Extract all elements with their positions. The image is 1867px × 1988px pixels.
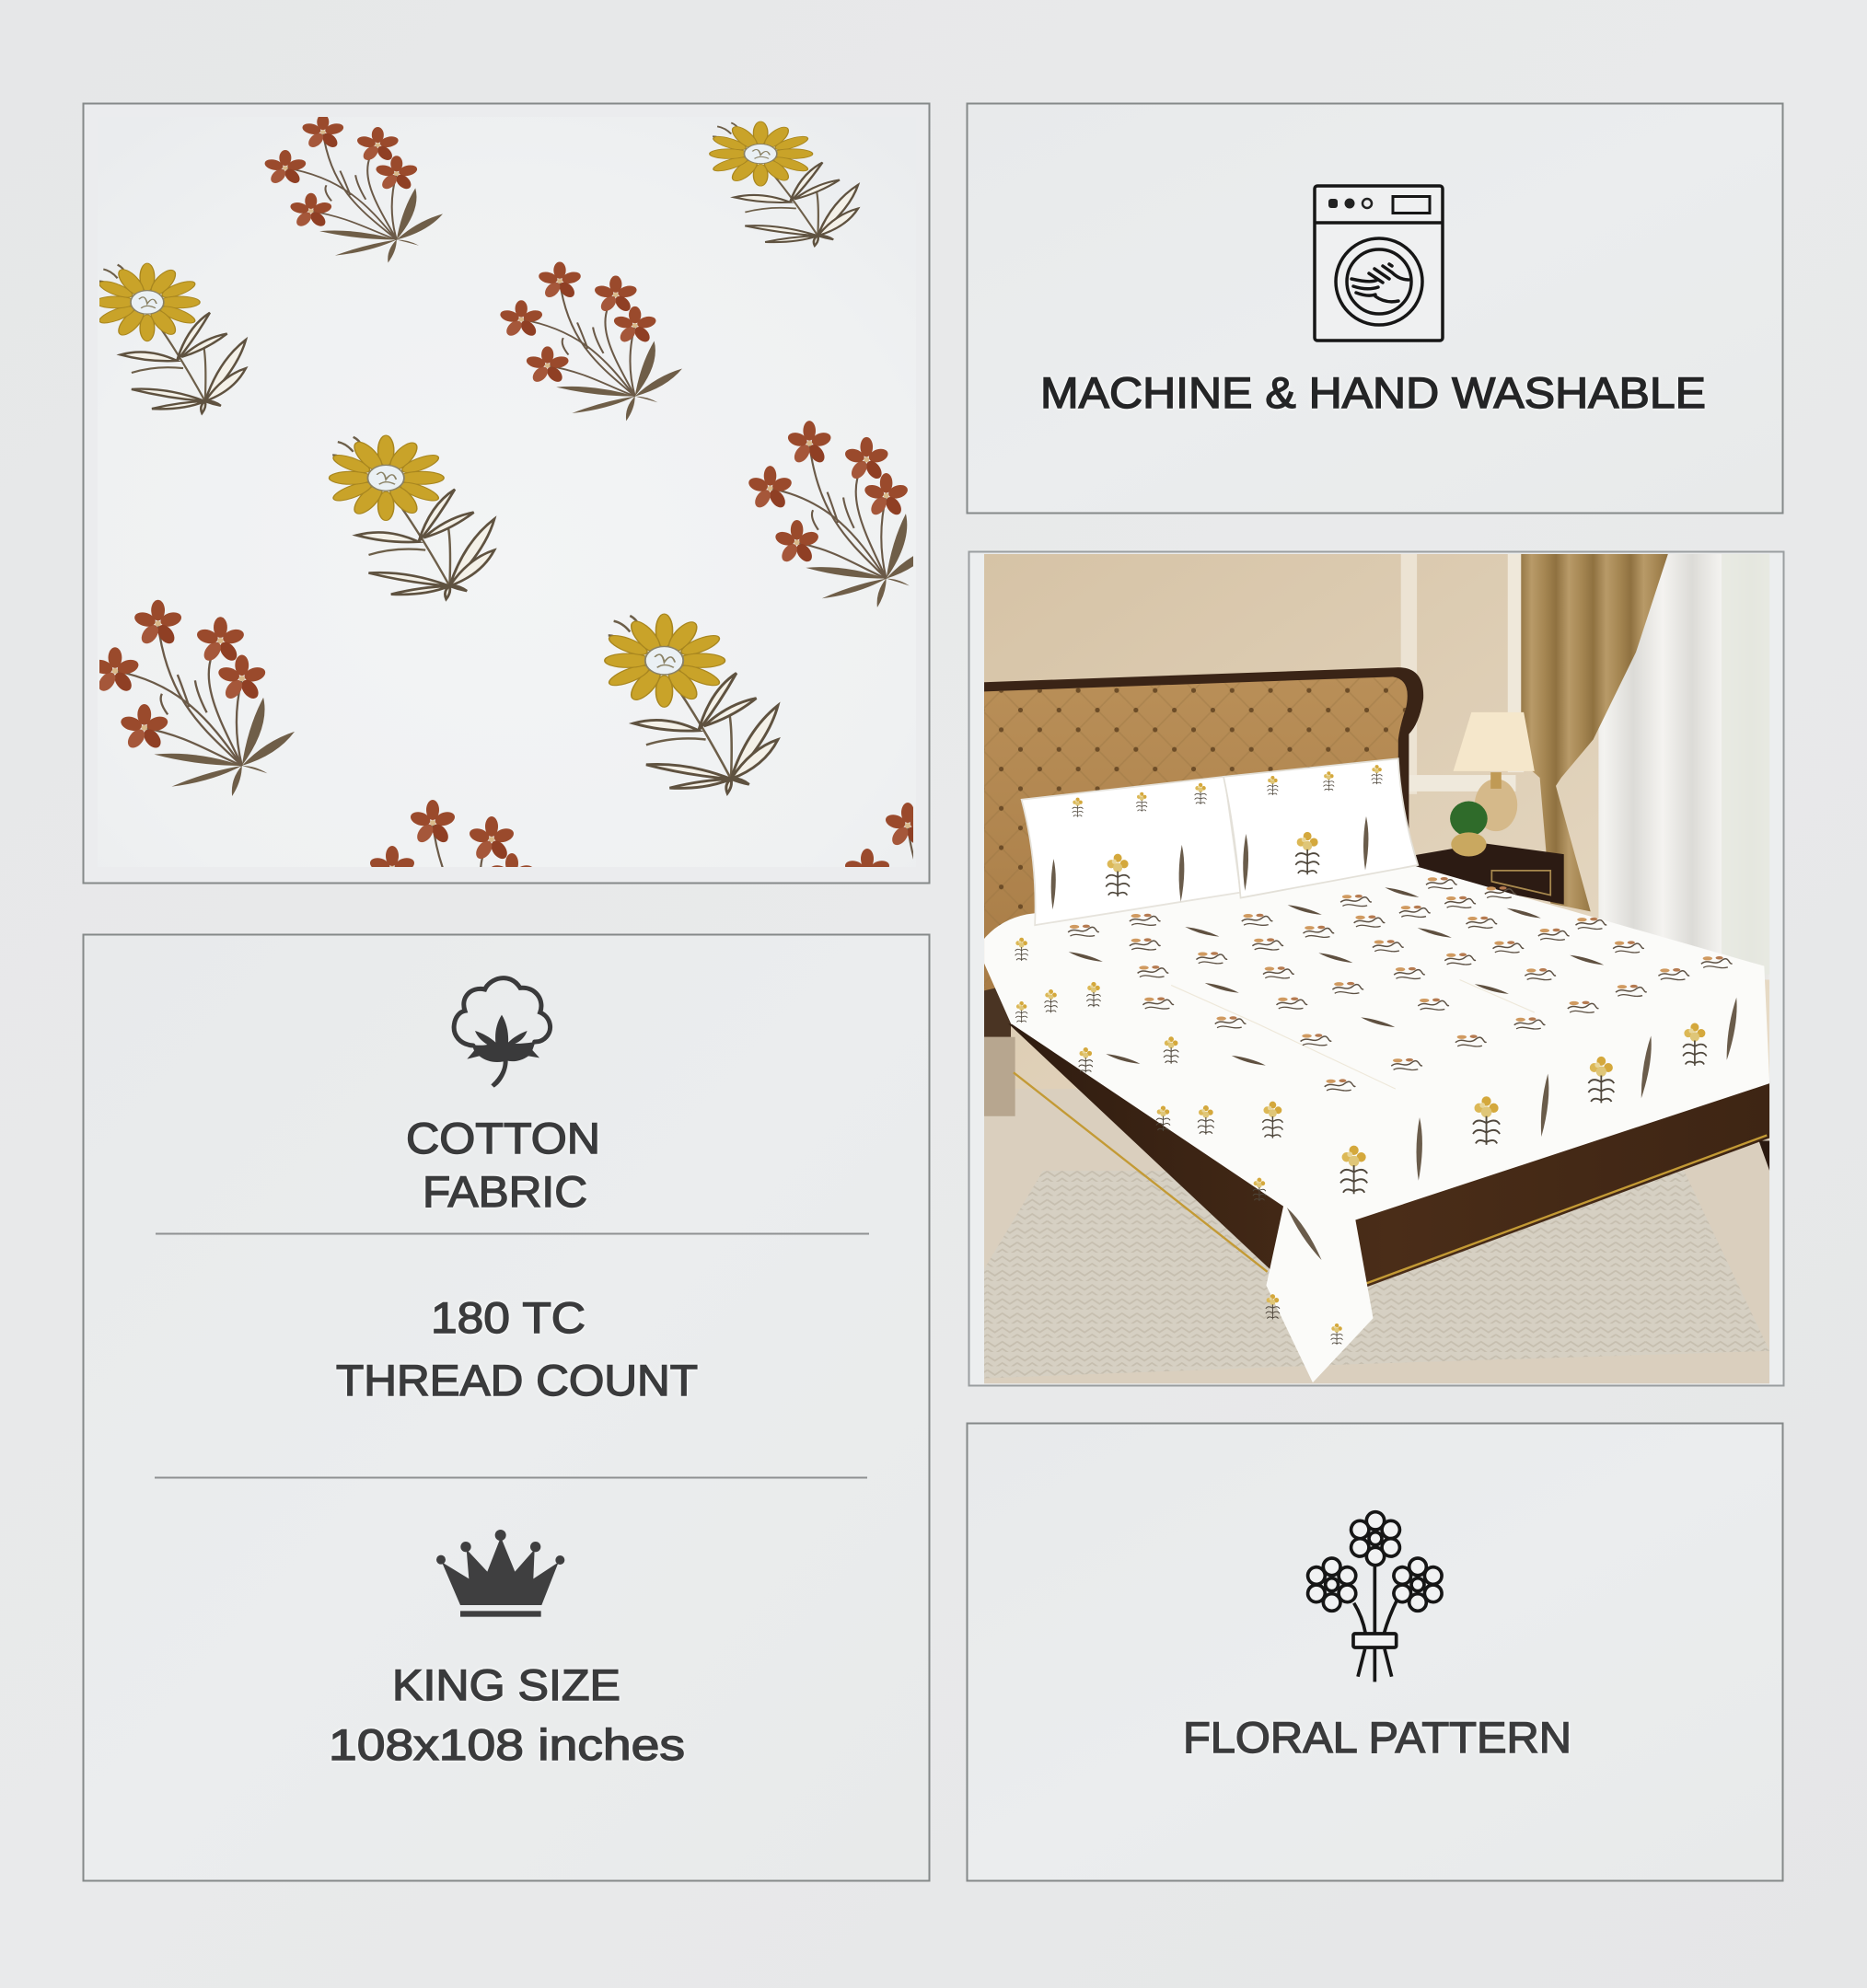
text: cotton fabric: FABRIC bbox=[423, 1167, 587, 1216]
text: king size: KING SIZE bbox=[392, 1660, 620, 1709]
text: king size bbox=[329, 1660, 685, 1769]
heading: machine and hand washable: MACHINE & HAND WASHABLE bbox=[1040, 368, 1706, 417]
panel: bedroom photo bbox=[968, 552, 1784, 1386]
text: thread count: 180 TC bbox=[431, 1293, 586, 1342]
heading: floral pattern: FLORAL PATTERN bbox=[1183, 1713, 1571, 1762]
text: cotton fabric bbox=[406, 1114, 600, 1216]
panel: machine and hand washable bbox=[967, 103, 1782, 514]
panel: floral pattern bbox=[967, 1423, 1782, 1881]
icon: crown bbox=[436, 1530, 565, 1617]
flower motifs on fabric bbox=[99, 117, 913, 867]
text: thread count bbox=[336, 1293, 698, 1404]
bedding motifs bbox=[1015, 765, 1739, 1345]
icon: cotton boll bbox=[451, 976, 552, 1088]
icon: flower bouquet bbox=[1305, 1509, 1444, 1682]
illustration: bed in room bbox=[984, 554, 1769, 1384]
text: king size: 108x108 inches bbox=[329, 1720, 685, 1769]
panel: fabric floral pattern swatch bbox=[83, 103, 930, 884]
text: cotton fabric: COTTON bbox=[406, 1114, 600, 1162]
text: thread count: THREAD COUNT bbox=[336, 1356, 698, 1404]
panel: fabric specifications bbox=[83, 935, 930, 1881]
icon: washing machine bbox=[1315, 186, 1443, 341]
